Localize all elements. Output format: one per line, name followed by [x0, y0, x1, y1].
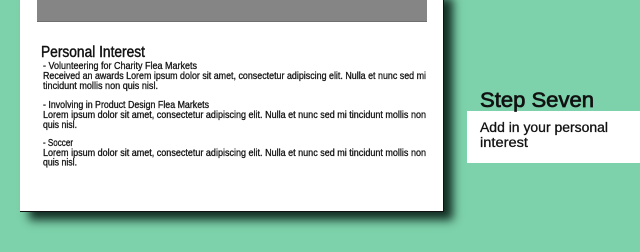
text block: product design entry: quis nisl.: [43, 120, 77, 131]
text block: volunteering entry: [43, 61, 426, 92]
text block: volunteering entry: - Volunteering for Charity Flea Markets: [43, 61, 197, 72]
text block: product design entry: [43, 100, 426, 131]
text block: soccer entry: quis nisl.: [43, 158, 77, 168]
text block: soccer entry: Lorem ipsum dolor sit amet, consectetur adipiscing elit. Nulla et nunc sed mi tincidunt mollis non: [43, 148, 426, 159]
text block: product design entry: - Involving in Product Design Flea Markets: [43, 100, 209, 111]
text block: product design entry: Lorem ipsum dolor sit amet, consectetur adipiscing elit. Nulla et nunc sed mi tincidunt mollis non: [43, 110, 426, 121]
heading: Personal Interest: Personal Interest: [41, 44, 146, 61]
text block: volunteering entry: tincidunt mollis non quis nisl.: [43, 81, 158, 92]
heading: Step Seven: Step Seven: [480, 89, 594, 112]
text block: soccer entry: [43, 138, 426, 168]
callout: white description box: [467, 111, 640, 163]
resume header grey block: [37, 0, 427, 22]
callout text: add in your personal interest: Add in your personal: [480, 120, 608, 135]
callout text: add in your personal interest: interest: [480, 135, 528, 150]
panel: resume sheet: [20, 0, 444, 212]
callout text: add in your personal interest: [480, 120, 608, 150]
text block: soccer entry: - Soccer: [43, 138, 74, 149]
text block: volunteering entry: Received an awards Lorem ipsum dolor sit amet, consectetur adipiscing elit. Nulla et nunc sed mi: [43, 71, 426, 82]
